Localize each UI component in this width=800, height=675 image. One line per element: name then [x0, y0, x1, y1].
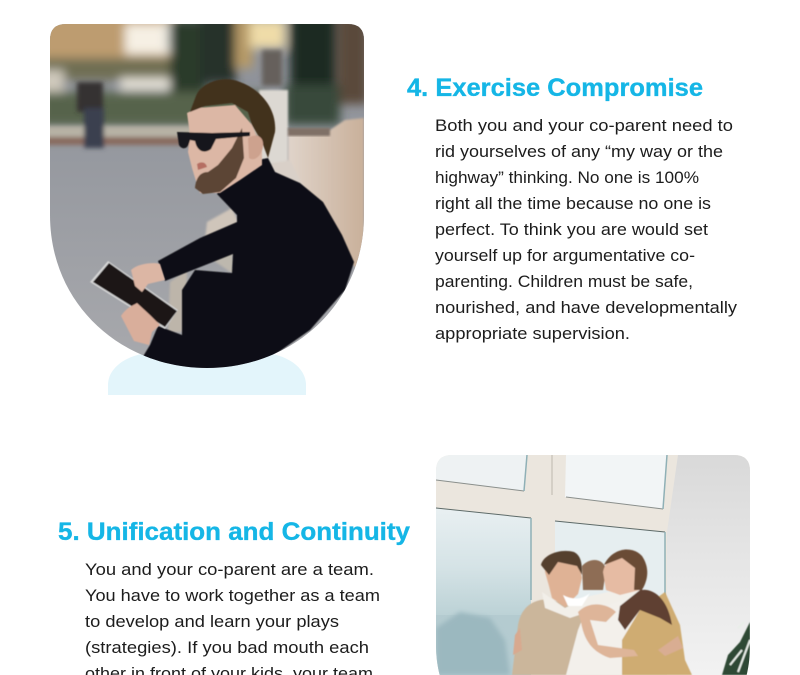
family	[512, 550, 692, 675]
decorative pale blue shape under photo	[108, 352, 306, 395]
text block: Exercise Compromise body: appropriate supervision.	[435, 325, 630, 343]
text block: Unification and Continuity body: (strategies). If you bad mouth each	[85, 639, 369, 657]
text block: Exercise Compromise body: nourished, and have developmentally	[435, 299, 738, 317]
tablet and hands	[90, 261, 178, 345]
text block: Unification and Continuity body	[85, 561, 380, 675]
heading: 4. Exercise Compromise: 4. Exercise Compromise	[407, 74, 703, 102]
text block: Exercise Compromise body: highway” thinking. No one is 100%	[435, 169, 699, 187]
wall	[667, 455, 750, 675]
window panes	[436, 455, 667, 675]
photo: family hugging	[436, 455, 750, 675]
photo: man with tablet	[50, 24, 364, 368]
text block: Exercise Compromise body: rid yourselves of any “my way or the	[435, 143, 723, 161]
text block: Unification and Continuity body: You and your co-parent are a team.	[85, 561, 374, 579]
man's body	[143, 157, 355, 368]
heading: 5. Unification and Continuity: 5. Unification and Continuity	[58, 518, 410, 546]
plant	[722, 622, 750, 675]
text block: Exercise Compromise body	[435, 117, 738, 343]
text block: Exercise Compromise body: perfect. To think you are would set	[435, 221, 708, 239]
text block: Exercise Compromise body: parenting. Children must be safe,	[435, 273, 693, 291]
text block: Exercise Compromise body: yourself up for argumentative co-	[435, 247, 695, 265]
text block: Unification and Continuity body: to develop and learn your plays	[85, 613, 339, 631]
text block: Exercise Compromise body: right all the time because no one is	[435, 195, 711, 213]
man's head	[177, 79, 275, 194]
text block: Unification and Continuity body: You have to work together as a team	[85, 587, 380, 605]
text block: Exercise Compromise body: Both you and your co-parent need to	[435, 117, 733, 135]
